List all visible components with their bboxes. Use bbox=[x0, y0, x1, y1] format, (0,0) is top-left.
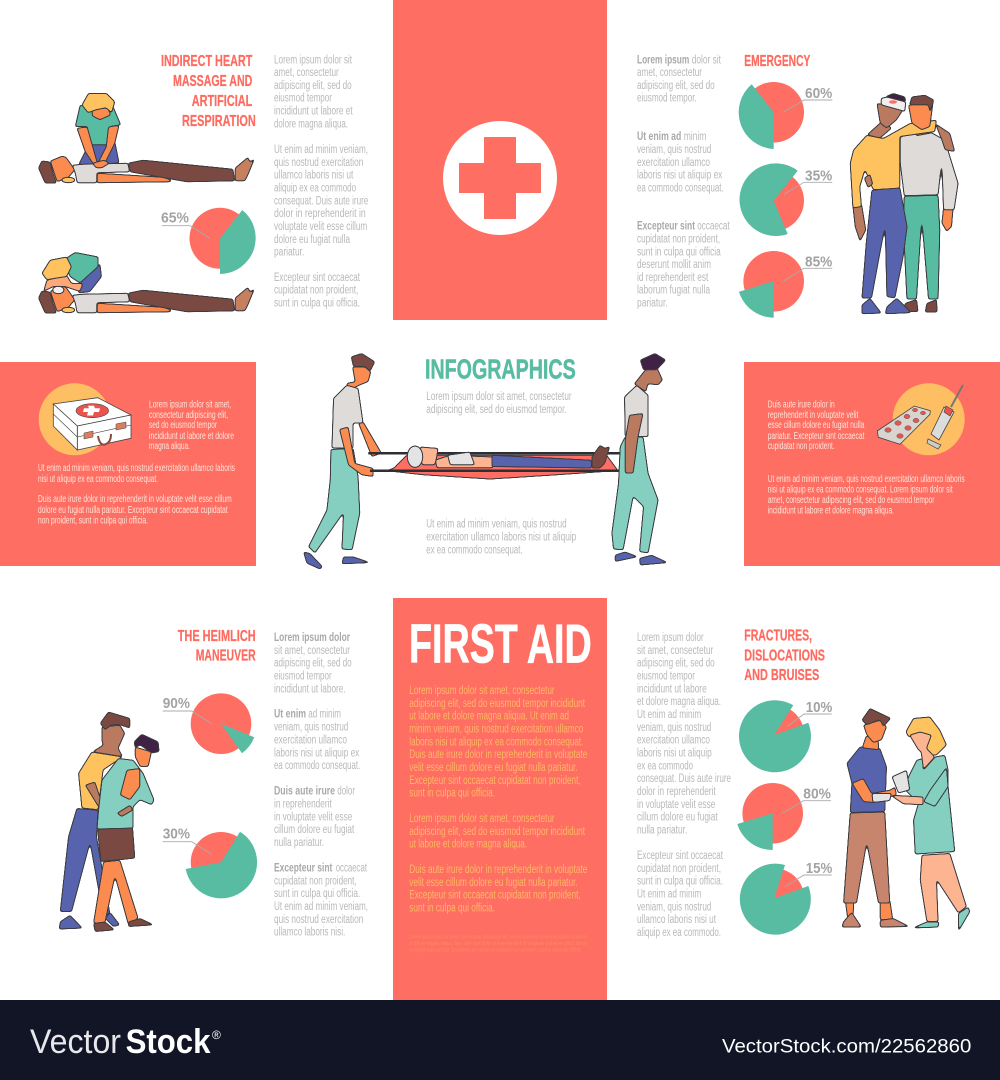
text block: emergency description: eiusmod tempor. bbox=[637, 93, 697, 105]
text block: heimlich description: cupidatat non proident, bbox=[274, 875, 357, 887]
text block: first aid body: sunt in culpa qui officia. bbox=[409, 788, 495, 800]
panel: indirect heart massage bbox=[38, 53, 368, 313]
text block: outro: ex ea commodo consequat. bbox=[426, 545, 523, 557]
text block: fractures description: cupidatat non proident, bbox=[637, 863, 721, 875]
text block: heimlich description: ad minim bbox=[308, 709, 341, 721]
text block: kit description: consectetur adipiscing elit, bbox=[149, 410, 228, 421]
panel: heimlich maneuver bbox=[59, 628, 368, 939]
heading: heimlich maneuver: THE HEIMLICH bbox=[178, 628, 256, 645]
text block: fine print: eu fugiat nulla pariatur. Excepteur sint occaecat cupidatat non proident, sunt in culpa qui officia. bbox=[409, 948, 581, 954]
text: image url: VectorStock.com/22562860 bbox=[722, 1037, 971, 1058]
panel: top centre with medical cross bbox=[393, 0, 607, 320]
text block: fractures description: eiusmod tempor bbox=[637, 670, 695, 682]
text block: heart massage description: adipiscing elit, sed do bbox=[274, 80, 352, 92]
text block: first aid body: velit esse cillum dolore eu fugiat nulla pariatur. bbox=[409, 762, 578, 774]
text block: fractures description: et dolore magna aliqua. bbox=[637, 696, 721, 708]
text block: first aid body: minim veniam, quis nostrud exercitation ullamco bbox=[409, 724, 583, 736]
text block: emergency description: Lorem ipsum bbox=[637, 54, 689, 66]
text block: heimlich description: in voluptate velit esse bbox=[274, 812, 352, 824]
text block: fractures description: in voluptate velit esse bbox=[637, 799, 715, 811]
heading: heimlich maneuver bbox=[178, 628, 256, 665]
text block: heart massage description: amet, consectetur bbox=[274, 67, 339, 79]
text block: medicines description bbox=[768, 400, 965, 516]
text block: first aid body: Excepteur sint occaecat cupidatat non proident, bbox=[409, 890, 581, 902]
text block: heart massage description: pariatur. bbox=[274, 247, 304, 259]
text block: medicines description: incididunt ut labore et dolore magna aliqua. bbox=[768, 506, 894, 516]
text block: emergency description: cupidatat non proident, bbox=[637, 234, 720, 246]
pie chart: 65% bbox=[161, 208, 256, 274]
text block: heimlich description: nulla pariatur. bbox=[274, 837, 324, 849]
text block: kit description bbox=[38, 400, 235, 526]
illustration: chest compressions bbox=[38, 93, 255, 183]
text block: emergency description: deserunt mollit anim bbox=[637, 259, 711, 271]
text block: heart massage description: dolor in reprehenderit in bbox=[274, 208, 366, 220]
text block: first aid body: ut labore et dolore magna aliqua. Ut enim ad bbox=[409, 711, 569, 723]
text block: kit description: nisi ut aliquip ex ea commodo consequat. bbox=[38, 474, 158, 485]
logo: vectorstock bbox=[30, 1023, 221, 1061]
text block: first aid body: ut labore et dolore magna aliqua. bbox=[409, 839, 527, 851]
text block: kit description: Duis aute irure dolor in reprehenderit in voluptate velit esse cillum bbox=[38, 494, 232, 505]
text block: fine print: et dolore magna aliqua. Duis aute irure dolor in reprehenderit in voluptate velit esse cillum dolore bbox=[409, 941, 587, 947]
footer: vectorstock bar bbox=[0, 1000, 1000, 1080]
logo: vectorstock: Vector bbox=[30, 1023, 121, 1061]
panel: fractures, dislocations and bruises bbox=[637, 628, 970, 939]
text block: first aid body: Lorem ipsum dolor sit amet, consectetur bbox=[409, 813, 555, 825]
text block: fractures description: cillum dolore eu fugiat bbox=[637, 812, 718, 824]
text block: heart massage description: dolore eu fugiat nulla bbox=[274, 234, 350, 246]
text block: heart massage description: ullamco laboris nisi ut bbox=[274, 170, 354, 182]
text block: fractures description: consequat. Duis aute irure bbox=[637, 773, 731, 785]
pie chart: 80% bbox=[737, 783, 831, 850]
text block: heart massage description bbox=[274, 54, 368, 310]
text block: heimlich description: Excepteur sint bbox=[274, 862, 332, 874]
heading: fractures: AND BRUISES bbox=[744, 667, 819, 684]
text block: heimlich description: incididunt ut labore. bbox=[274, 683, 346, 695]
text block: fractures description: adipiscing elit, sed do bbox=[637, 658, 715, 670]
text block: outro: exercitation ullamco laboris nisi ut aliquip bbox=[426, 532, 576, 544]
panel: medicines bbox=[744, 362, 1000, 566]
text block: fine print bbox=[409, 934, 587, 954]
panel: infographics centre bbox=[303, 353, 668, 569]
text block: heart massage description: Ut enim ad minim veniam, bbox=[274, 144, 368, 156]
pie chart: 80%: 80% bbox=[803, 786, 831, 803]
text block: heimlich description: Ut enim bbox=[274, 709, 306, 721]
text block: kit description: Lorem ipsum dolor sit amet, bbox=[149, 400, 231, 410]
text block: outro: Ut enim ad minim veniam, quis nostrud bbox=[426, 519, 567, 531]
text block: medicines description: Duis aute irure dolor in bbox=[768, 400, 835, 410]
text block: first aid body: Duis aute irure dolor in reprehenderit in voluptate bbox=[409, 749, 587, 761]
text block: heart massage description: cupidatat non proident, bbox=[274, 285, 358, 297]
text block: heimlich description: ea commodo consequat. bbox=[274, 760, 360, 772]
heading: indirect heart massage: INDIRECT HEART bbox=[161, 53, 253, 70]
text block: fractures description: exercitation ullamco bbox=[637, 735, 710, 747]
logo: vectorstock: Stock bbox=[126, 1023, 211, 1061]
text block: fractures description: ullamco laboris nisi ut bbox=[637, 914, 717, 926]
text block: fractures description: Ut enim ad minim bbox=[637, 888, 701, 900]
illustration: heimlich maneuver figures bbox=[59, 712, 159, 932]
text block: fractures description: sunt in culpa qui officia. bbox=[637, 876, 723, 888]
illustration: man helping injured friend bbox=[850, 93, 958, 314]
text block: fractures description: sit amet, consectetur bbox=[637, 645, 713, 657]
text block: fractures description: incididunt ut labore bbox=[637, 683, 707, 695]
text block: kit description: dolore eu fugiat nulla pariatur. Excepteur sint occaecat cupidatat bbox=[38, 505, 228, 516]
title: first aid: FIRST AID bbox=[409, 613, 592, 675]
logo: vectorstock: ® bbox=[212, 1028, 221, 1042]
text block: fractures description: veniam, quis nostrud bbox=[637, 722, 711, 734]
text block: first aid body: sunt in culpa qui officia. bbox=[409, 902, 495, 914]
text block: emergency description: exercitation ullamco bbox=[637, 157, 710, 169]
title: infographics: INFOGRAPHICS bbox=[425, 353, 576, 384]
text block: emergency description: Excepteur sint bbox=[637, 221, 695, 233]
heading: fractures bbox=[744, 628, 825, 684]
text block: emergency description: ea commodo consequat. bbox=[637, 183, 724, 195]
text block: heart massage description: sunt in culpa qui officia. bbox=[274, 298, 360, 310]
pie chart: 30%: 30% bbox=[163, 826, 190, 842]
text block: fractures description bbox=[637, 632, 731, 939]
text block: medicines description: pariatur. Excepteur sint occaecat bbox=[768, 431, 865, 442]
text block: emergency description: laborum fugiat nulla bbox=[637, 285, 710, 297]
text block: heimlich description: Lorem ipsum dolor bbox=[274, 632, 350, 644]
text block: heimlich description: sunt in culpa qui officia. bbox=[274, 888, 360, 900]
panel: first aid kit bbox=[0, 362, 256, 566]
text block: heimlich description: sit amet, consectetur bbox=[274, 645, 350, 657]
text block: kit description: incididunt ut labore et dolore bbox=[149, 431, 234, 442]
text block: emergency description: id reprehenderit est bbox=[637, 272, 709, 284]
pie chart: 85%: 85% bbox=[805, 253, 832, 270]
text block: heart massage description: incididunt ut labore et bbox=[274, 106, 353, 118]
text block: emergency description: veniam, quis nostrud bbox=[637, 144, 711, 156]
text block: intro: adipiscing elit, sed do eiusmod tempor. bbox=[426, 404, 567, 416]
text block: heimlich description: laboris nisi ut aliquip ex bbox=[274, 747, 359, 759]
text block: heimlich description: ullamco laboris nisi. bbox=[274, 927, 345, 939]
text block: heimlich description: in reprehenderit bbox=[274, 798, 332, 810]
text block: emergency description: adipiscing elit, sed do bbox=[637, 80, 715, 92]
pie chart: 10% bbox=[739, 699, 832, 772]
text block: fractures description: veniam, quis nostrud bbox=[637, 901, 711, 913]
text block: medicines description: esse cillum dolore eu fugiat nulla bbox=[768, 420, 865, 431]
text block: first aid body bbox=[409, 685, 587, 914]
icon: pills and syringe bbox=[877, 383, 965, 455]
pie chart: 90% bbox=[163, 693, 254, 754]
text block: first aid body: Excepteur sint occaecat cupidatat non proident, bbox=[409, 775, 581, 787]
illustration: bandaging an arm bbox=[842, 708, 970, 932]
text block: emergency description: Ut enim ad bbox=[637, 131, 681, 143]
text block: emergency description: pariatur. bbox=[637, 298, 668, 310]
text block: heimlich description: adipiscing elit, sed do bbox=[274, 658, 352, 670]
text block: heimlich description: quis nostrud exercitation bbox=[274, 914, 363, 926]
text block: heimlich description: cillum dolore eu fugiat bbox=[274, 824, 355, 836]
pie chart: 15% bbox=[740, 860, 832, 935]
text block: heimlich description: Ut enim ad minim veniam, bbox=[274, 901, 368, 913]
text block: heart massage description: eiusmod tempor bbox=[274, 93, 332, 105]
panel: emergency bbox=[637, 53, 958, 318]
text block: emergency description: amet, consectetur bbox=[637, 67, 702, 79]
text block: heart massage description: Excepteur sint occaecat bbox=[274, 272, 361, 284]
pie chart: 35% bbox=[740, 163, 832, 236]
text block: kit description: Ut enim ad minim veniam, quis nostrud exercitation ullamco laboris bbox=[38, 463, 235, 474]
heading: fractures: FRACTURES, bbox=[744, 628, 812, 645]
icon: first aid kit bbox=[39, 383, 131, 455]
heading: indirect heart massage: RESPIRATION bbox=[182, 113, 256, 130]
text block: heimlich description: eiusmod tempor bbox=[274, 670, 332, 682]
text block: intro bbox=[426, 391, 572, 416]
heading: indirect heart massage bbox=[161, 53, 256, 130]
text block: emergency description: dolor sit bbox=[692, 54, 722, 66]
pie chart: 85% bbox=[739, 251, 832, 318]
text block: fractures description: dolor in reprehenderit bbox=[637, 786, 716, 798]
text block: heimlich description: veniam, quis nostrud bbox=[274, 722, 348, 734]
text block: first aid body: adipiscing elit, sed do eiusmod tempor incididunt bbox=[409, 826, 586, 838]
heading: indirect heart massage: MASSAGE AND bbox=[173, 73, 252, 90]
pie chart: 65%: 65% bbox=[161, 209, 189, 226]
text block: fractures description: Excepteur sint occaecat bbox=[637, 850, 724, 862]
text block: heimlich description: Duis aute irure bbox=[274, 786, 335, 798]
illustration: stretcher carriers and patient bbox=[303, 353, 668, 569]
text block: heimlich description: dolor bbox=[337, 786, 355, 798]
text block: medicines description: reprehenderit in voluptate velit bbox=[768, 410, 859, 421]
text block: kit description: magna aliqua. bbox=[149, 441, 190, 452]
panel: first aid centre bbox=[393, 598, 607, 1000]
text block: heart massage description: voluptate velit esse cillum bbox=[274, 221, 367, 233]
text block: first aid body: adipiscing elit, sed do eiusmod tempor incididunt bbox=[409, 698, 586, 710]
text block: fractures description: ex ea commodo bbox=[637, 760, 693, 772]
pie chart: 15%: 15% bbox=[806, 860, 832, 877]
text block: first aid body: Lorem ipsum dolor sit amet, consectetur bbox=[409, 685, 555, 697]
text block: heart massage description: dolore magna aliqua. bbox=[274, 118, 348, 130]
illustration: artificial respiration bbox=[38, 252, 255, 313]
text block: first aid body: velit esse cillum dolore eu fugiat nulla pariatur. bbox=[409, 877, 578, 889]
heading: fractures: DISLOCATIONS bbox=[744, 647, 825, 664]
pie chart: 60% bbox=[739, 82, 832, 149]
heading: indirect heart massage: ARTIFICIAL bbox=[192, 93, 252, 110]
heading: emergency: EMERGENCY bbox=[744, 53, 811, 70]
text block: heart massage description: quis nostrud exercitation bbox=[274, 157, 363, 169]
text block: heart massage description: aliquip ex ea commodo bbox=[274, 182, 356, 194]
text block: emergency description: sunt in culpa qui officia bbox=[637, 246, 721, 258]
text block: fractures description: Lorem ipsum dolor bbox=[637, 632, 704, 644]
text block: outro bbox=[426, 519, 576, 557]
text block: heimlich description: exercitation ullamco bbox=[274, 734, 347, 746]
text block: first aid body: laboris nisi ut aliquip ex ea commodo consequat. bbox=[409, 736, 583, 748]
text block: heimlich description bbox=[274, 632, 368, 939]
pie chart: 10%: 10% bbox=[806, 699, 832, 716]
text block: fractures description: nulla pariatur. bbox=[637, 824, 687, 836]
text block: kit description: non proident, sunt in culpa qui officia. bbox=[38, 516, 148, 526]
text block: intro: Lorem ipsum dolor sit amet, consectetur bbox=[426, 391, 572, 403]
text block: heart massage description: Lorem ipsum dolor sit bbox=[274, 54, 353, 66]
text block: kit description: sed do eiusmod tempor bbox=[149, 420, 217, 431]
text block: fractures description: aliquip ex ea commodo. bbox=[637, 927, 721, 939]
text block: emergency description bbox=[637, 54, 730, 310]
pie chart: 90%: 90% bbox=[163, 695, 190, 712]
text block: fine print: Lorem ipsum dolor sit amet, consectetur adipiscing elit, sed do eiusmod tempor incididunt ut labore bbox=[409, 934, 587, 940]
pie chart: 35%: 35% bbox=[805, 167, 832, 184]
text block: fractures description: Ut enim ad minim bbox=[637, 709, 701, 721]
text block: emergency description: occaecat bbox=[697, 221, 730, 233]
pie chart: 60%: 60% bbox=[805, 85, 832, 102]
text block: medicines description: cupidatat non proident. bbox=[768, 441, 835, 452]
text block: heimlich description: occaecat bbox=[336, 862, 368, 874]
text block: heart massage description: consequat. Duis aute irure bbox=[274, 195, 368, 207]
heading: heimlich maneuver: MANEUVER bbox=[196, 648, 256, 665]
text block: fractures description: laboris nisi ut aliquip bbox=[637, 748, 712, 760]
text block: emergency description: minim bbox=[684, 131, 706, 143]
pie chart: 30% bbox=[163, 826, 257, 898]
text block: first aid body: Duis aute irure dolor in reprehenderit in voluptate bbox=[409, 864, 587, 876]
text block: emergency description: laboris nisi ut aliquip ex bbox=[637, 170, 722, 182]
